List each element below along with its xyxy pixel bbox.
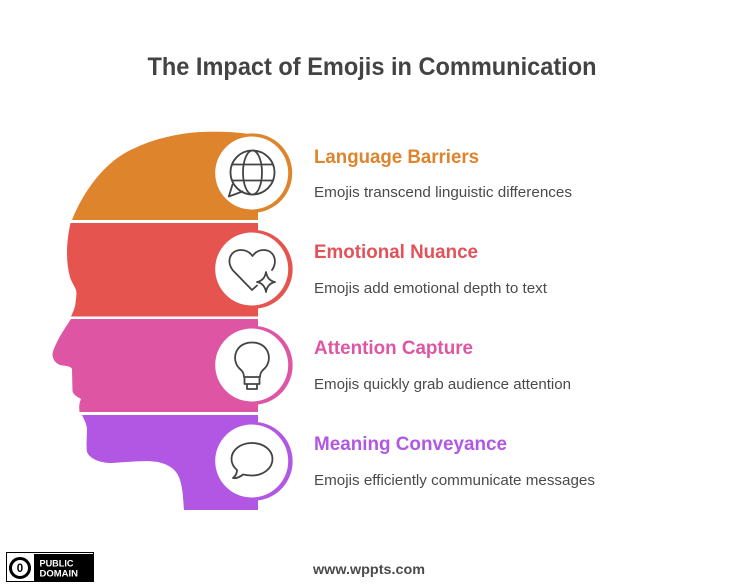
item: emotional nuance	[314, 242, 548, 297]
head segment: language barriers	[72, 132, 292, 220]
item: meaning conveyance	[314, 434, 595, 489]
head graphic	[6, 132, 595, 582]
public domain badge: DOMAIN	[40, 568, 78, 579]
item: language barriers: Language Barriers	[314, 147, 479, 168]
head segment: meaning conveyance	[82, 415, 293, 510]
item: attention capture	[314, 338, 571, 393]
icon: heart with sparkle	[229, 250, 275, 292]
item: attention capture: Attention Capture	[314, 338, 473, 359]
icon: speech bubble	[232, 443, 272, 478]
item: emotional nuance: Emojis add emotional depth to text	[314, 280, 548, 297]
public domain badge	[6, 552, 94, 582]
icon: light bulb	[235, 342, 269, 389]
public domain badge: PUBLIC	[40, 558, 74, 570]
item: meaning conveyance: Meaning Conveyance	[314, 434, 507, 455]
public domain badge: 0	[17, 563, 23, 575]
head segment: attention capture	[52, 319, 293, 412]
item: language barriers: Emojis transcend linguistic differences	[314, 184, 572, 201]
item: attention capture: Emojis quickly grab audience attention	[314, 376, 571, 393]
icon: globe speech bubble	[229, 150, 274, 196]
head segment: emotional nuance	[67, 223, 293, 316]
item: language barriers	[314, 147, 572, 201]
source url: www.wppts.com	[312, 562, 425, 577]
item: meaning conveyance: Emojis efficiently communicate messages	[314, 472, 595, 489]
item: emotional nuance: Emotional Nuance	[314, 242, 478, 263]
title: The Impact of Emojis in Communication	[148, 53, 596, 81]
